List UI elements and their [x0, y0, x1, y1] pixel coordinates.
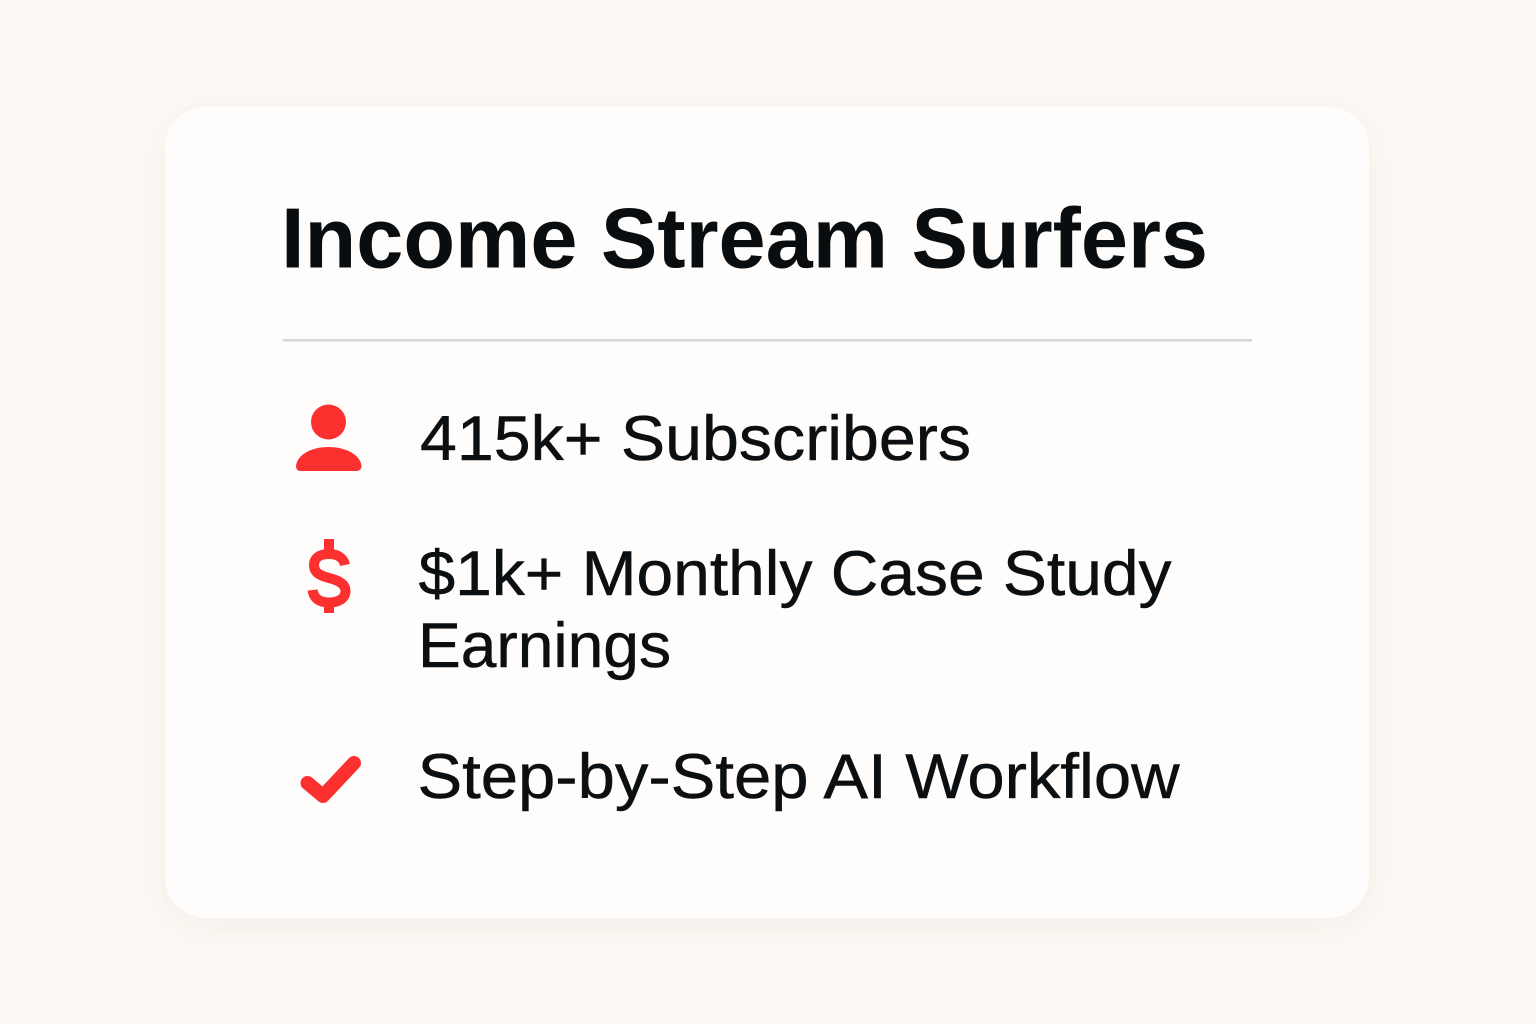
- text: Step-by-Step AI Workflow: Step-by-Step AI Workflow: [418, 742, 1180, 812]
- list item: workflow: [308, 742, 1180, 812]
- list item: subscribers: [296, 404, 971, 474]
- panel: profile card: [165, 107, 1369, 918]
- text: $1k+ Monthly Case Study Earnings: [418, 539, 1172, 681]
- list item: earnings: [312, 539, 1172, 681]
- text: $1k+ Monthly Case Study Earnings: $1k+ Monthly Case Study: [418, 539, 1172, 609]
- icon: person: [296, 404, 362, 471]
- icon: check mark: [308, 763, 354, 796]
- text: 415k+ Subscribers: 415k+ Subscribers: [420, 404, 971, 474]
- title: Income Stream Surfers: [281, 192, 1208, 286]
- text: $1k+ Monthly Case Study Earnings: Earnings: [418, 611, 671, 681]
- icon: dollar sign: [312, 539, 346, 613]
